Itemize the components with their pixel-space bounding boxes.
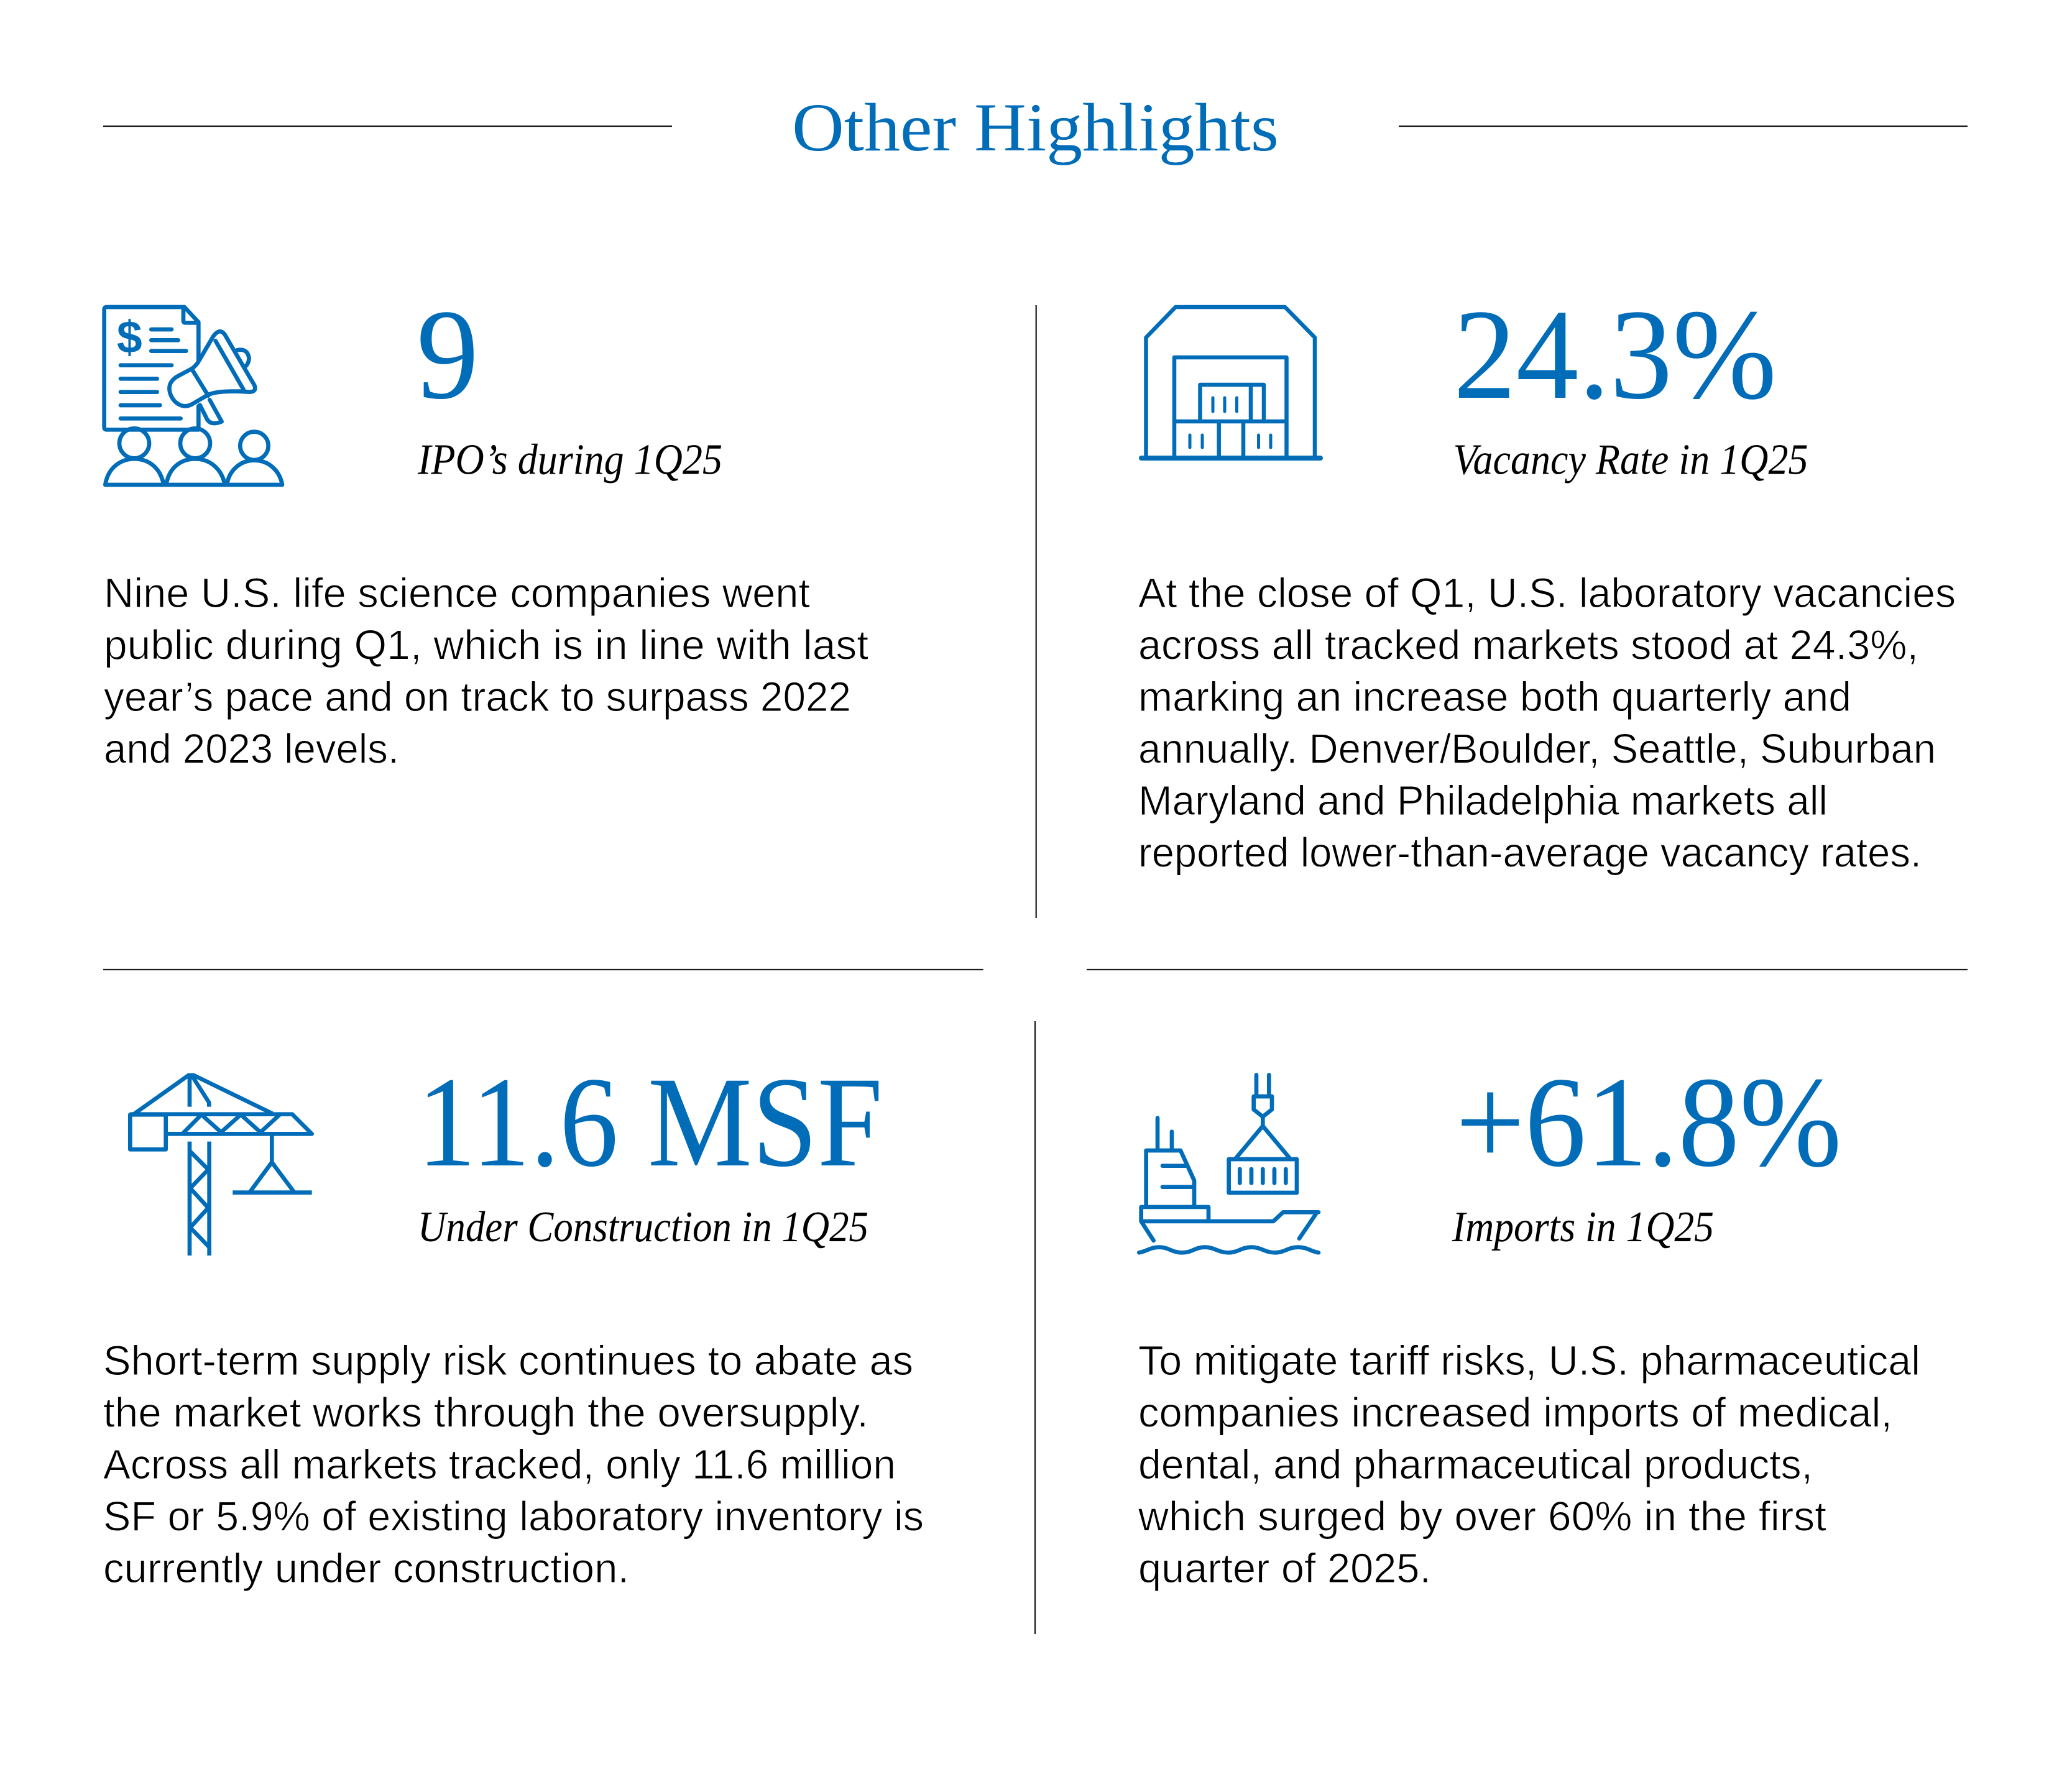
big number: 9 xyxy=(417,283,479,426)
body text: Across all markets tracked, only 11.6 million xyxy=(103,1441,896,1488)
caption: Imports in 1Q25 xyxy=(1452,1203,1714,1251)
big number: +61.8% xyxy=(1456,1050,1841,1193)
panel: imports xyxy=(1138,1050,1920,1592)
body text: marking an increase both quarterly and xyxy=(1138,674,1851,720)
body text: quarter of 2025. xyxy=(1138,1545,1431,1592)
caption: Vacancy Rate in 1Q25 xyxy=(1453,436,1808,484)
caption: IPO’s during 1Q25 xyxy=(417,436,722,484)
title: Other Highlights xyxy=(792,90,1279,165)
icon: document, megaphone and audience xyxy=(104,307,282,485)
body text: Nine U.S. life science companies went xyxy=(104,570,810,617)
body text: dental, and pharmaceutical products, xyxy=(1138,1441,1813,1488)
panel: construction xyxy=(103,1050,924,1592)
body text: the market works through the oversupply. xyxy=(103,1390,868,1436)
icon: tower crane xyxy=(130,1075,312,1256)
body text: currently under construction. xyxy=(103,1545,629,1592)
body text: Short-term supply risk continues to abate as xyxy=(103,1338,913,1384)
icon: warehouse xyxy=(1141,307,1320,458)
body text xyxy=(103,1338,924,1592)
big number: 24.3% xyxy=(1453,283,1777,426)
icon: document, megaphone and audience: $ xyxy=(117,312,142,363)
caption: Under Construction in 1Q25 xyxy=(418,1203,868,1251)
body text xyxy=(104,570,868,772)
body text: SF or 5.9% of existing laboratory inventory is xyxy=(103,1493,924,1540)
panel: vacancy xyxy=(1138,283,1956,876)
body text xyxy=(1138,570,1956,876)
body text: reported lower-than-average vacancy rates. xyxy=(1138,829,1922,876)
body text: To mitigate tariff risks, U.S. pharmaceutical xyxy=(1138,1338,1920,1384)
panel: IPOs xyxy=(104,283,868,772)
body text: companies increased imports of medical, xyxy=(1138,1390,1892,1436)
big number: 11.6 MSF xyxy=(417,1050,883,1193)
body text: year’s pace and on track to surpass 2022 xyxy=(104,674,851,720)
icon: cargo ship and container xyxy=(1139,1075,1319,1252)
body text: which surged by over 60% in the first xyxy=(1138,1493,1826,1540)
body text: At the close of Q1, U.S. laboratory vacancies xyxy=(1138,570,1956,617)
body text: and 2023 levels. xyxy=(104,726,399,772)
body text: annually. Denver/Boulder, Seattle, Suburban xyxy=(1138,726,1936,772)
body text: across all tracked markets stood at 24.3%, xyxy=(1138,622,1918,669)
body text: Maryland and Philadelphia markets all xyxy=(1138,778,1828,824)
body text: public during Q1, which is in line with last xyxy=(104,622,868,669)
body text xyxy=(1138,1338,1920,1592)
